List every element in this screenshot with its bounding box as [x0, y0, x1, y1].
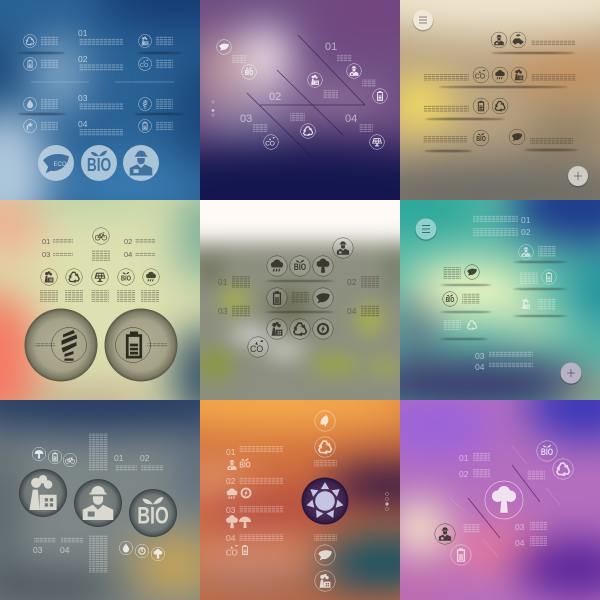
big circle: bulb [24, 308, 98, 382]
icon: co2 [264, 135, 278, 149]
panel: teal infographic [340, 165, 600, 411]
numbers: 04 [475, 362, 485, 372]
numbers: 02 [140, 453, 150, 463]
numbers: 04 [515, 538, 525, 548]
icon: recycle [492, 98, 508, 114]
icon: battery [24, 58, 36, 70]
big circle: eco leaf: ECO [53, 162, 67, 168]
icon: mushroom cloud [32, 447, 46, 461]
icon: leaf [509, 129, 525, 145]
icon: battery [48, 450, 62, 464]
icon: engineer [333, 238, 353, 258]
icon: leaf [315, 545, 335, 565]
icon: drop [119, 541, 133, 555]
icon: factory [315, 571, 335, 591]
numbers [459, 453, 525, 548]
icon: factory [41, 269, 57, 285]
numbers: 02 [78, 54, 88, 64]
numbers: 03 [475, 351, 485, 361]
text blocks [40, 250, 159, 302]
numbers: 01 [42, 237, 50, 246]
numbers [240, 41, 357, 125]
text blocks [463, 452, 547, 546]
icon: factory [511, 67, 527, 83]
shadows [440, 261, 567, 340]
button: add [560, 362, 582, 385]
icon: leaf [217, 40, 231, 54]
icon: battery [267, 288, 287, 308]
panel: sand infographic [400, 0, 600, 200]
numbers: 02 [269, 91, 281, 103]
icon: co2 [473, 67, 489, 83]
shadows [17, 52, 184, 115]
icon: recycle [315, 437, 335, 457]
icon: bio [443, 292, 457, 306]
icon: rain cloud [143, 269, 159, 285]
icon: bicycle [93, 228, 109, 244]
text blocks [232, 276, 379, 317]
text blocks [232, 54, 376, 132]
icon: factory [522, 299, 530, 309]
icon: bio [473, 130, 489, 146]
numbers: 01 [325, 41, 337, 53]
numbers: 03 [33, 545, 43, 555]
numbers: 04 [345, 113, 357, 125]
icon: recycle [301, 124, 315, 138]
numbers [226, 447, 236, 543]
panel: blue blurred eco infographic [0, 0, 200, 200]
light text blocks [443, 215, 556, 368]
icon: solar panel [370, 135, 384, 149]
panel: slate infographic with three medallions [0, 368, 270, 600]
icon: solar panel [92, 269, 108, 285]
text columns [34, 433, 163, 573]
text blocks [239, 446, 337, 541]
icon: battery [542, 270, 556, 284]
numbers: 03 [226, 505, 236, 515]
numbers: 03 [42, 250, 50, 259]
icon: engineer [347, 64, 361, 78]
divider [31, 82, 174, 83]
icon: battery [139, 120, 151, 132]
numbers: 02 [347, 277, 357, 287]
panel: purple diagonal infographic [200, 0, 400, 200]
diagonal slashes [468, 465, 540, 538]
numbers [218, 277, 357, 316]
numbers: 04 [60, 545, 70, 555]
icon: recycle [466, 321, 478, 331]
icon: tree [151, 547, 165, 561]
button: menu [412, 10, 434, 32]
icon: bio [242, 65, 256, 79]
numbers: 01 [459, 453, 469, 463]
numbers: 04 [347, 306, 357, 316]
icon: tree [313, 256, 333, 276]
number captions [53, 239, 155, 256]
numbers [475, 215, 531, 372]
numbers: 01 [521, 215, 531, 225]
numbers [33, 453, 150, 555]
icon: factory [139, 35, 151, 47]
icon: factory [308, 73, 322, 87]
icon: recycle [553, 459, 573, 479]
button: add [568, 166, 588, 188]
medallion: sun [302, 478, 348, 524]
dark text blocks [443, 267, 480, 304]
numbers: 02 [124, 237, 132, 246]
icon: co2 [248, 337, 268, 357]
text blocks [423, 40, 576, 144]
icon: bio [290, 256, 310, 276]
numbers: 02 [459, 469, 469, 479]
icon: arrow [24, 120, 36, 132]
pager dots [386, 492, 388, 510]
icon: drop [24, 98, 36, 110]
icon: engineer [519, 245, 533, 259]
numbers: 03 [218, 306, 228, 316]
icon: bio [118, 269, 134, 285]
panel: sunset infographic [130, 370, 465, 600]
shadows [424, 52, 578, 152]
button: menu [415, 218, 437, 241]
icon: bicycle [63, 453, 77, 467]
icon: bulb [139, 98, 151, 110]
icon: leaf [315, 411, 335, 431]
numbers: 03 [240, 113, 252, 125]
numbers: 03 [78, 93, 88, 103]
panel: pastel infographic with two large circles [0, 180, 240, 430]
small icons [226, 458, 251, 557]
icon: power [135, 544, 149, 558]
icon: energy [313, 319, 333, 339]
panel: white and olive infographic [170, 170, 430, 400]
numbers: 03 [515, 522, 525, 532]
medallion: factory [19, 469, 67, 517]
numbers: 01 [226, 447, 236, 457]
big circle: bio [81, 145, 117, 181]
numbers [78, 28, 88, 129]
icon: engineer [491, 32, 507, 48]
big circle: engineer [123, 145, 159, 181]
medallion: engineer [74, 479, 122, 527]
pager dots [212, 101, 214, 116]
panel: violet infographic [375, 367, 600, 600]
numbers: 04 [78, 119, 88, 129]
icon: car [510, 32, 526, 48]
faint lines [450, 446, 560, 557]
numbers: 01 [218, 277, 228, 287]
medallion: bio [129, 489, 177, 537]
numbers: 01 [78, 28, 88, 38]
icon: recycle [290, 319, 310, 339]
diagonal lines [247, 35, 365, 157]
icon: rain cloud [267, 256, 287, 276]
icon: recycle [66, 269, 82, 285]
big circle: eco leaf [38, 145, 74, 181]
numbers: 01 [114, 453, 124, 463]
numbers [42, 237, 132, 259]
numbers: 04 [226, 533, 236, 543]
text blocks [41, 36, 173, 136]
shadows [265, 280, 335, 313]
icon: bio [537, 441, 557, 461]
icon: co2 [139, 58, 151, 70]
icon: factory [267, 319, 287, 339]
big circle: battery [104, 308, 178, 382]
numbers: 02 [226, 476, 236, 486]
icon: leaf [465, 265, 479, 279]
icon: engineer [435, 524, 455, 544]
icon: battery [373, 89, 387, 103]
icon: battery [473, 98, 489, 114]
numbers: 02 [521, 227, 531, 237]
icon: battery [451, 545, 471, 565]
icon: cloud [492, 67, 508, 83]
icon: tree [485, 481, 523, 519]
numbers: 04 [124, 250, 132, 259]
icon: recycle [24, 35, 36, 47]
icon: leaf [313, 288, 333, 308]
